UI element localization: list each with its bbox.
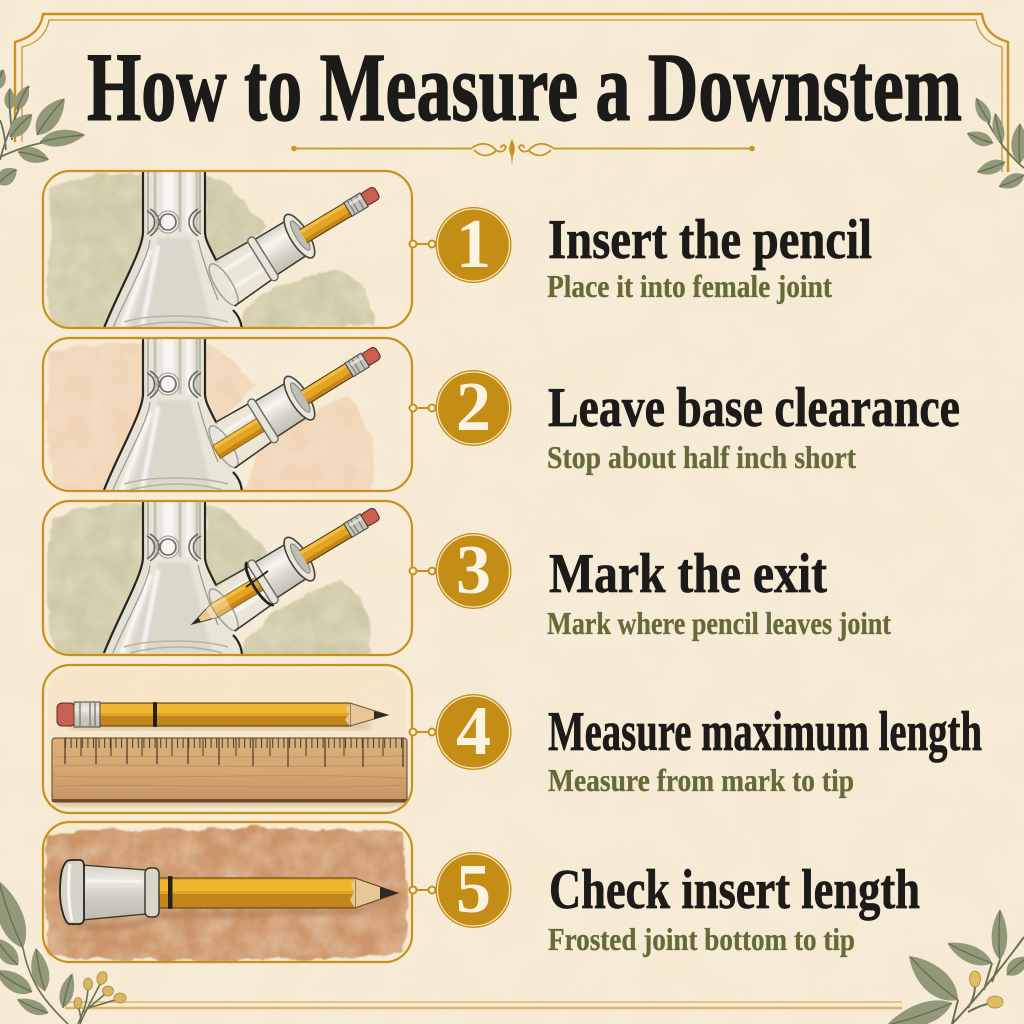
step 2 badge: 2 bbox=[456, 369, 491, 446]
step 5 heading: Check insert length bbox=[549, 859, 920, 921]
step 3 badge bbox=[436, 532, 512, 609]
pencil: inserted bbox=[299, 185, 381, 243]
glass joint bbox=[246, 533, 320, 605]
step 1 description: Place it into female joint bbox=[547, 268, 832, 304]
glass joint bbox=[60, 860, 159, 924]
step 3 badge: 3 bbox=[456, 532, 491, 609]
panel 5 border bbox=[43, 822, 412, 962]
step 5 description: Frosted joint bottom to tip bbox=[548, 921, 855, 957]
panel 4: measure maximum length bbox=[43, 665, 412, 813]
leaf sprig with buds: bottom left bbox=[0, 876, 126, 1024]
step 2 badge bbox=[436, 369, 512, 446]
step 4 connector bbox=[410, 728, 436, 736]
step 1 badge bbox=[436, 206, 512, 283]
leaf sprig: top right bbox=[964, 95, 1024, 193]
step 1 connector bbox=[410, 240, 436, 248]
pencil: above the joint bbox=[299, 506, 381, 564]
step 3 description: Mark where pencil leaves joint bbox=[547, 605, 891, 641]
step 1 badge: 1 bbox=[456, 206, 491, 283]
step 2 connector bbox=[410, 404, 436, 412]
glass joint bbox=[246, 372, 320, 444]
step 5 badge: 5 bbox=[456, 851, 491, 928]
leaf sprig with buds: bottom right bbox=[883, 909, 1024, 1024]
leaf sprig: top left bbox=[0, 67, 87, 190]
step 2 description: Stop about half inch short bbox=[547, 439, 856, 475]
step 5 badge bbox=[436, 851, 512, 928]
step 1 heading: Insert the pencil bbox=[548, 209, 872, 271]
glass beaker bbox=[103, 339, 272, 490]
ornamental top frame bbox=[15, 14, 1008, 172]
pencil: above the joint bbox=[301, 345, 382, 404]
panel 2: leave base clearance bbox=[42, 336, 414, 492]
step 3 connector bbox=[410, 568, 436, 574]
pencil: full length in the stem bbox=[188, 524, 353, 631]
bottom frame lines bbox=[65, 1002, 902, 1008]
panel 3 border bbox=[43, 501, 412, 655]
glass beaker bbox=[103, 502, 274, 654]
step 4 description: Measure from mark to tip bbox=[548, 762, 854, 798]
glass beaker bbox=[103, 172, 272, 327]
wooden ruler bbox=[52, 738, 407, 806]
step 5 connector bbox=[410, 886, 436, 894]
panel 1: insert the pencil bbox=[42, 170, 414, 330]
pencil in joint bbox=[155, 876, 398, 909]
pencil: inside the stem bbox=[213, 363, 354, 458]
pencil with mark bbox=[57, 702, 388, 730]
panel 2 border bbox=[43, 338, 412, 491]
black mark on pencil and joint bbox=[241, 562, 274, 608]
panel 1 border bbox=[43, 171, 412, 328]
watercolor wash: terracotta bbox=[45, 828, 407, 960]
step 4 badge: 4 bbox=[456, 693, 491, 770]
title divider ornament bbox=[291, 139, 755, 165]
step 4 badge bbox=[436, 693, 512, 770]
step 3 heading: Mark the exit bbox=[549, 543, 827, 605]
panel 3: mark the exit bbox=[42, 500, 414, 656]
panel 4 border bbox=[43, 665, 412, 813]
watercolor wash: olive bbox=[48, 503, 371, 658]
glass joint bbox=[246, 210, 320, 282]
watercolor wash: olive bbox=[48, 174, 373, 330]
cast shadow bbox=[66, 897, 395, 931]
watercolor wash: peach bbox=[47, 343, 375, 494]
panel 5: check insert length bbox=[43, 822, 412, 962]
watercolor wash: pale tan bbox=[48, 670, 406, 808]
